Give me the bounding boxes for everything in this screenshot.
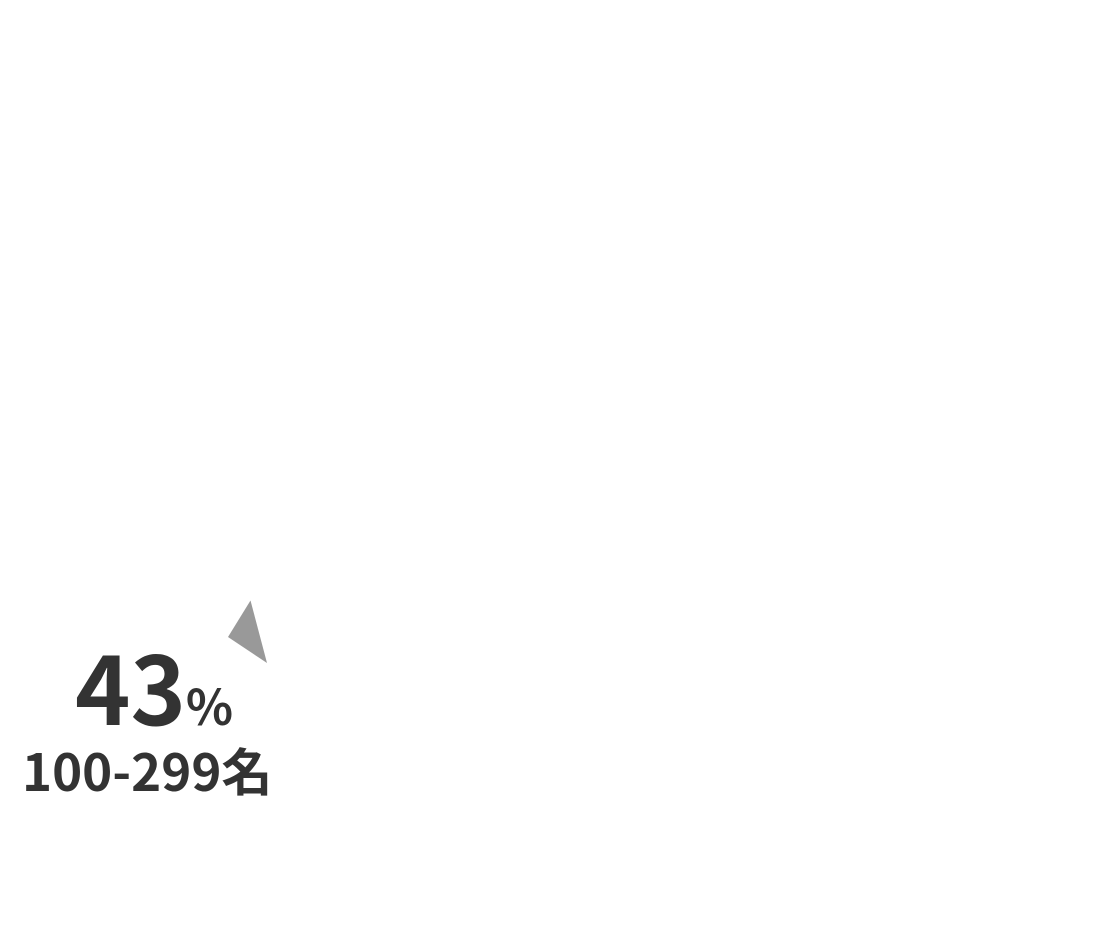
- category label: 100-299名: [22, 732, 272, 806]
- icon: grey triangle pointer: [228, 600, 267, 663]
- percentage value: 43%: [75, 617, 233, 753]
